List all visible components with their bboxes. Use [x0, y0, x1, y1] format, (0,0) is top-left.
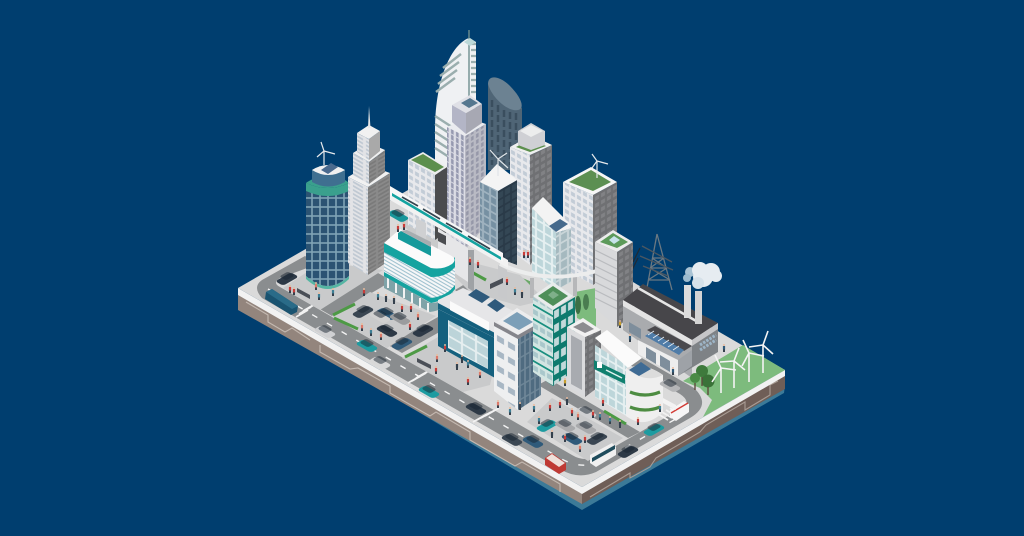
road network [257, 256, 702, 475]
buses [265, 289, 616, 467]
tower: grey stepped skyscraper [447, 95, 486, 250]
bus shelters [297, 278, 503, 369]
building: white office with glass side [494, 308, 541, 410]
green court with trees behind towers [518, 277, 596, 328]
platform: slab shadow [238, 296, 785, 510]
wind turbines [712, 331, 773, 393]
building: white tower with green roof [563, 154, 617, 285]
hedges [333, 269, 626, 424]
power pylon [632, 234, 673, 293]
cars [275, 272, 682, 459]
green park area [683, 345, 785, 417]
building: teal rounded mall [384, 229, 455, 312]
building: hospital [594, 330, 663, 422]
crowd of people [289, 222, 725, 452]
plazas [283, 212, 623, 461]
platform: white lip and ground [238, 171, 785, 494]
building: sloped glass tower [532, 197, 571, 290]
building: grey tower with green roof [595, 230, 633, 327]
tower: green crown skyscraper [510, 123, 552, 265]
tower: tall grey office [348, 106, 390, 275]
building: dark glass tower [480, 164, 517, 265]
tower: curved white skyscraper [435, 30, 476, 180]
tower: dark oval skyscraper [488, 77, 522, 170]
building: grey slim block [567, 318, 601, 397]
building: green roof back block [408, 152, 447, 240]
factory smoke [683, 262, 722, 289]
icon: wind turbine on dark tower [490, 150, 508, 176]
small teal car behind monorail [386, 208, 410, 223]
building: teal round tower [306, 142, 349, 289]
building: teal green block [533, 282, 575, 386]
factory [623, 284, 718, 378]
elevated monorail [390, 186, 597, 300]
crosswalks [296, 302, 680, 422]
building: solar roof glass block [438, 288, 525, 378]
fire truck and ambulance [545, 398, 689, 474]
platform: earth slab [238, 292, 785, 504]
trees [690, 365, 714, 395]
